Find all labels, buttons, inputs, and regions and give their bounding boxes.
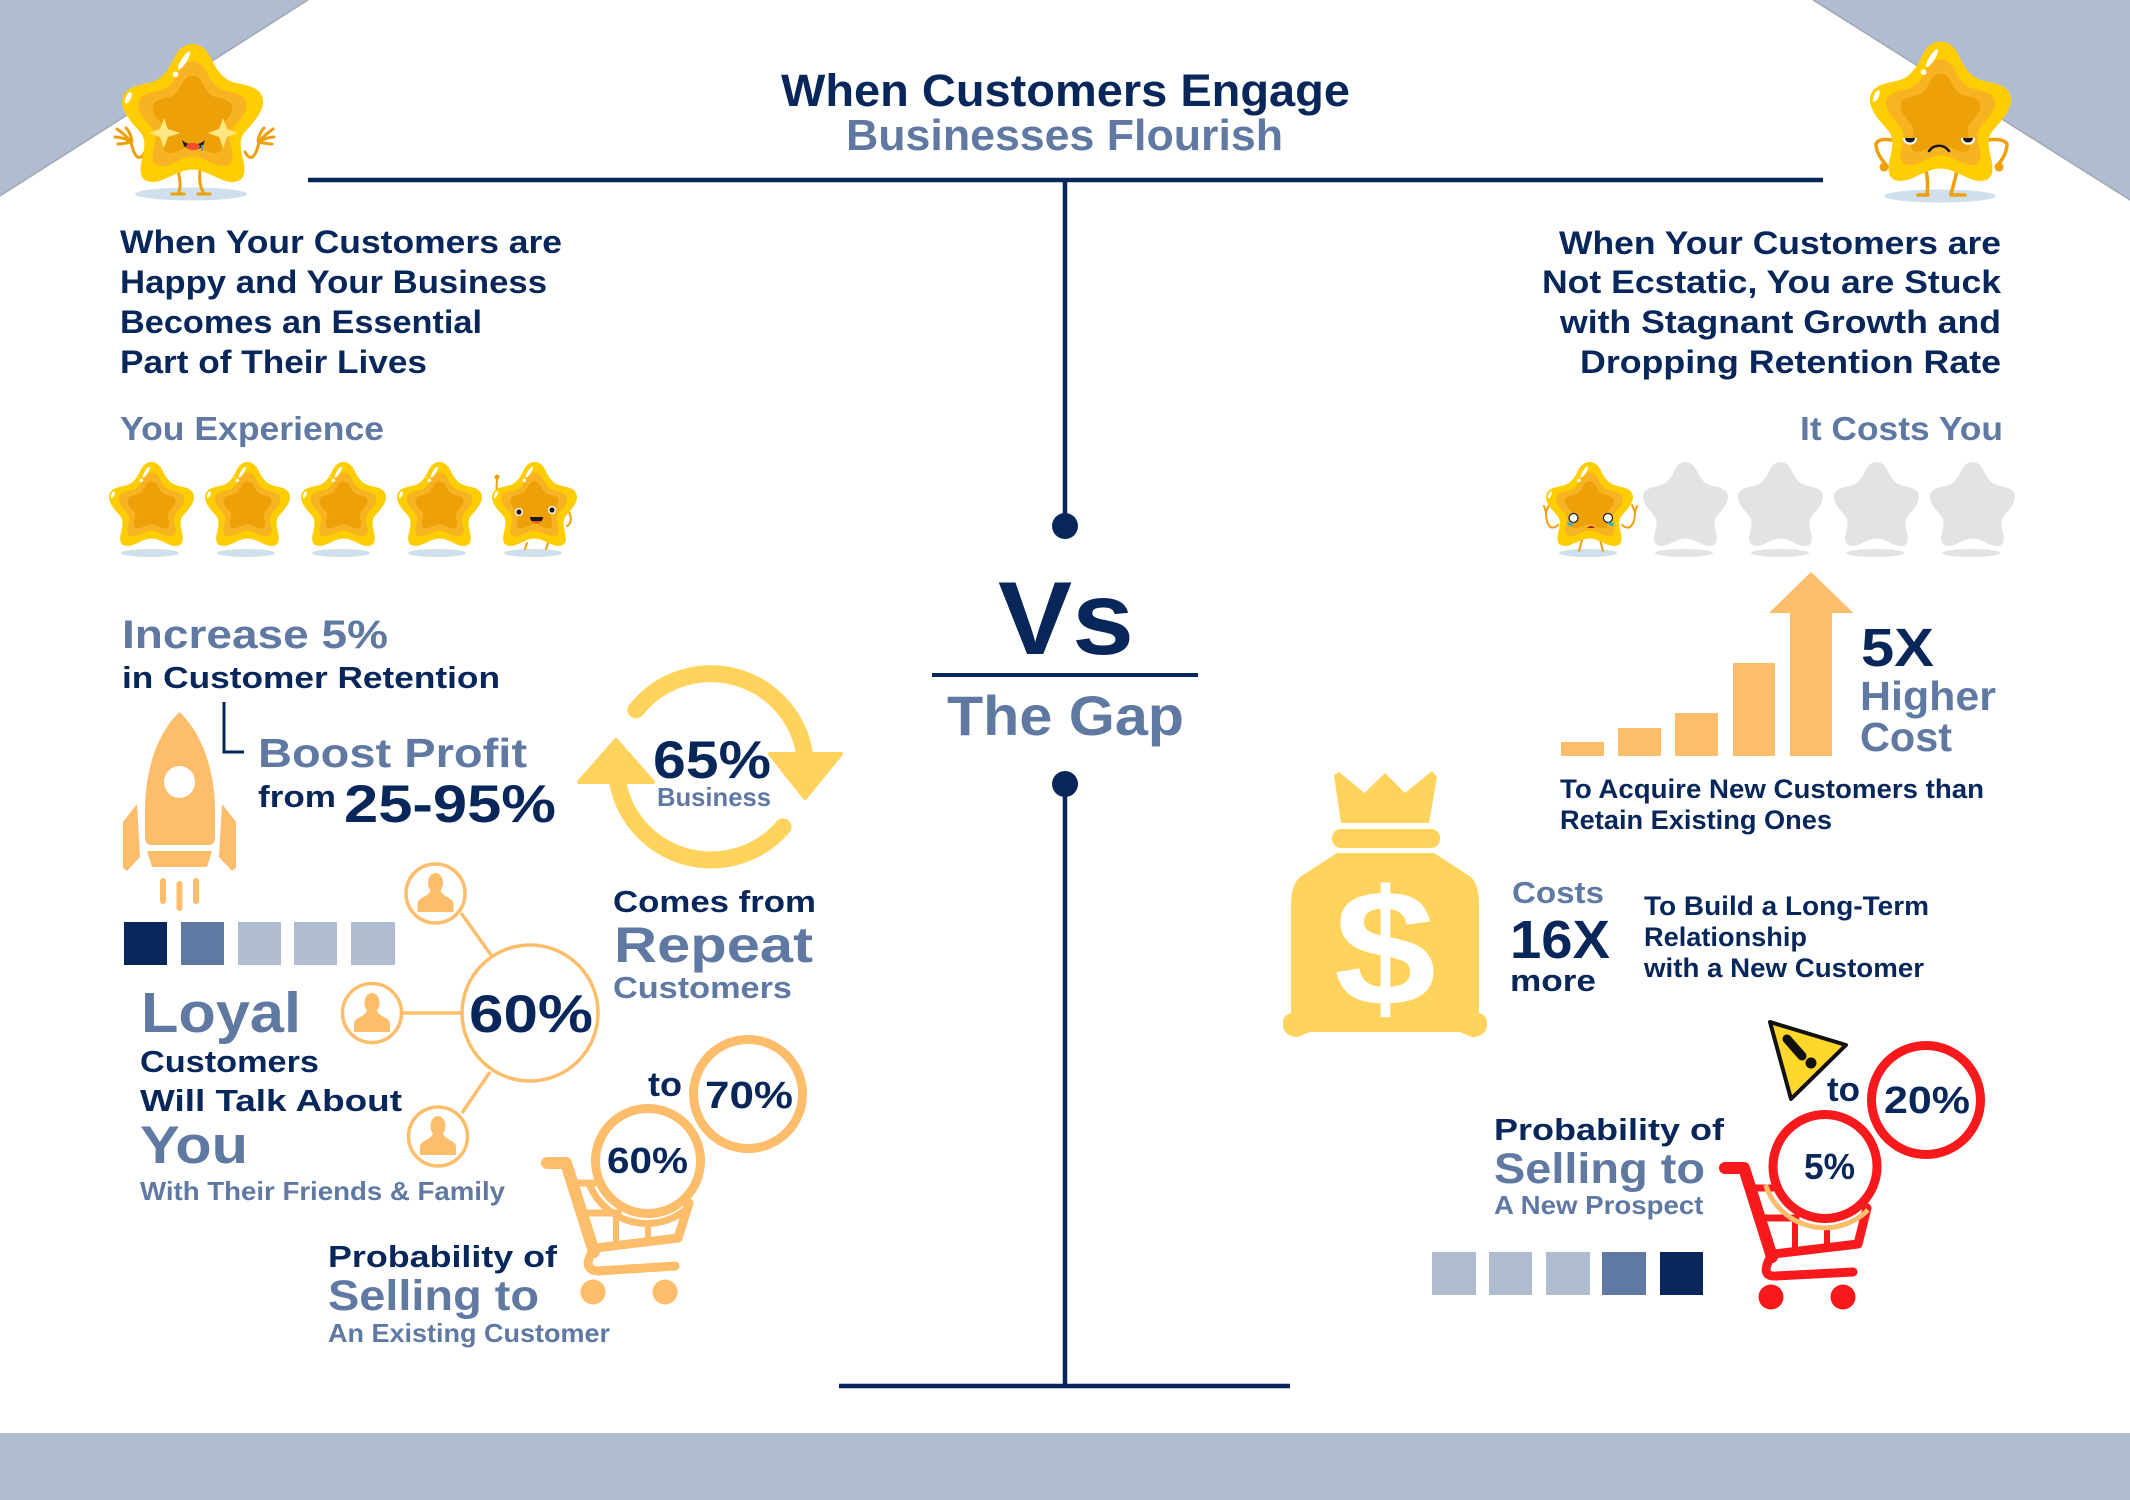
text: loyal customers: You bbox=[140, 1116, 248, 1175]
stat: profit boost: from bbox=[258, 779, 336, 814]
background corner: top left bbox=[0, 0, 308, 196]
text: happy customers statement: Happy and Your Business bbox=[120, 264, 547, 300]
versus heading bbox=[932, 561, 1198, 747]
icon: money bag: $ bbox=[1334, 856, 1436, 1040]
stat: 65% business: 65% bbox=[653, 731, 771, 790]
heading: you experience: You Experience bbox=[120, 410, 384, 447]
icon: money bag bbox=[1283, 771, 1487, 1040]
text: unhappy customers statement bbox=[1542, 225, 2001, 380]
stat: costs 16x more: Relationship bbox=[1644, 922, 1807, 952]
stat: 5x higher cost: Retain Existing Ones bbox=[1560, 805, 1832, 835]
text: happy customers statement: Part of Their Lives bbox=[120, 344, 427, 380]
title bbox=[781, 65, 1350, 160]
stat: costs 16x more: 16X bbox=[1510, 910, 1610, 970]
text: probability existing customer: An Existing Customer bbox=[328, 1318, 610, 1348]
text: probability new prospect: Selling to bbox=[1494, 1145, 1705, 1193]
scale: one in five squares bbox=[124, 922, 395, 965]
stat: profit boost: in Customer Retention bbox=[122, 660, 500, 695]
text: unhappy customers statement: Not Ecstatic, You are Stuck bbox=[1542, 264, 2001, 300]
text: loyal customers: Will Talk About bbox=[140, 1083, 402, 1118]
icon: orange shopping cart with 60% to 70% bbox=[547, 1040, 802, 1304]
stat: profit boost: 25-95% bbox=[344, 775, 556, 834]
stat: profit boost bbox=[122, 613, 556, 834]
icon: unhappy star mascot bbox=[1870, 42, 2011, 202]
text: loyal customers: Customers bbox=[140, 1044, 319, 1079]
stat: 5x higher cost bbox=[1560, 618, 1996, 835]
stat: 65% business: Business bbox=[657, 782, 771, 812]
stat: costs 16x more: Costs bbox=[1512, 875, 1604, 910]
versus heading: Vs bbox=[998, 561, 1134, 677]
background corner: top right bbox=[1813, 0, 2130, 200]
title: Businesses Flourish bbox=[846, 111, 1283, 160]
stat: profit boost: Increase 5% bbox=[122, 613, 388, 657]
text: comes from repeat customers: Repeat bbox=[614, 917, 813, 973]
text: happy customers statement bbox=[120, 224, 562, 380]
diagram: 60% referral network: 60% bbox=[469, 985, 593, 1044]
stat: costs 16x more: with a New Customer bbox=[1643, 953, 1925, 983]
text: unhappy customers statement: with Stagnant Growth and bbox=[1559, 304, 2001, 340]
bottom band bbox=[0, 1433, 2130, 1500]
icon: happy star mascot bbox=[115, 44, 274, 200]
diagram: 60% referral network bbox=[342, 864, 598, 1166]
text: probability existing customer bbox=[328, 1239, 610, 1348]
scale: five squares right bbox=[1432, 1252, 1703, 1295]
icon: orange shopping cart with 60% to 70%: 60% bbox=[607, 1140, 688, 1181]
icon: warning triangle bbox=[1770, 1022, 1846, 1099]
stat: 65% business bbox=[653, 731, 771, 812]
icon: rocket bbox=[123, 712, 236, 911]
title: When Customers Engage bbox=[781, 65, 1350, 116]
stat: 5x higher cost: To Acquire New Customers than bbox=[1560, 774, 1984, 804]
versus heading: The Gap bbox=[947, 684, 1184, 747]
icon: red shopping cart with 5% to 20% bbox=[1725, 1046, 1980, 1310]
stat: 5x higher cost: Cost bbox=[1860, 714, 1952, 760]
stat: costs 16x more: To Build a Long-Term bbox=[1644, 891, 1929, 921]
central divider structure bbox=[308, 180, 1823, 1386]
text: happy customers statement: When Your Customers are bbox=[120, 224, 562, 260]
text: happy customers statement: Becomes an Essential bbox=[120, 304, 482, 340]
icon: circular arrows bbox=[579, 674, 841, 860]
text: probability new prospect: Probability of bbox=[1494, 1112, 1725, 1147]
rating: five gold stars bbox=[109, 462, 577, 557]
stat: costs 16x more: more bbox=[1510, 963, 1596, 998]
stat: profit boost: Boost Profit bbox=[258, 730, 527, 776]
text: probability new prospect bbox=[1494, 1112, 1725, 1220]
stat: 5x higher cost: 5X bbox=[1861, 618, 1934, 678]
text: loyal customers: With Their Friends & Family bbox=[140, 1176, 506, 1206]
text: probability existing customer: Probability of bbox=[328, 1239, 558, 1274]
icon: orange shopping cart with 60% to 70%: 70% bbox=[705, 1075, 793, 1117]
text: loyal customers: Loyal bbox=[141, 981, 301, 1045]
text: comes from repeat customers: Customers bbox=[613, 970, 792, 1005]
text: comes from repeat customers: Comes from bbox=[613, 884, 816, 919]
icon: red shopping cart with 5% to 20%: 5% bbox=[1804, 1146, 1855, 1187]
chart: rising cost bars with arrow bbox=[1561, 572, 1854, 756]
rating: one sad star and four grey stars bbox=[1544, 462, 2015, 557]
text: probability existing customer: Selling to bbox=[328, 1272, 539, 1320]
icon: orange shopping cart with 60% to 70%: to bbox=[648, 1066, 682, 1104]
icon: red shopping cart with 5% to 20%: 20% bbox=[1884, 1080, 1970, 1122]
text: unhappy customers statement: When Your Customers are bbox=[1559, 225, 2001, 261]
text: probability new prospect: A New Prospect bbox=[1494, 1190, 1704, 1220]
text: unhappy customers statement: Dropping Retention Rate bbox=[1580, 344, 2001, 380]
text: loyal customers bbox=[140, 981, 506, 1206]
stat: costs 16x more bbox=[1510, 875, 1929, 998]
text: comes from repeat customers bbox=[613, 884, 816, 1005]
stat: 5x higher cost: Higher bbox=[1860, 673, 1996, 719]
icon: red shopping cart with 5% to 20%: to bbox=[1827, 1071, 1860, 1109]
heading: it costs you: It Costs You bbox=[1800, 410, 2003, 447]
